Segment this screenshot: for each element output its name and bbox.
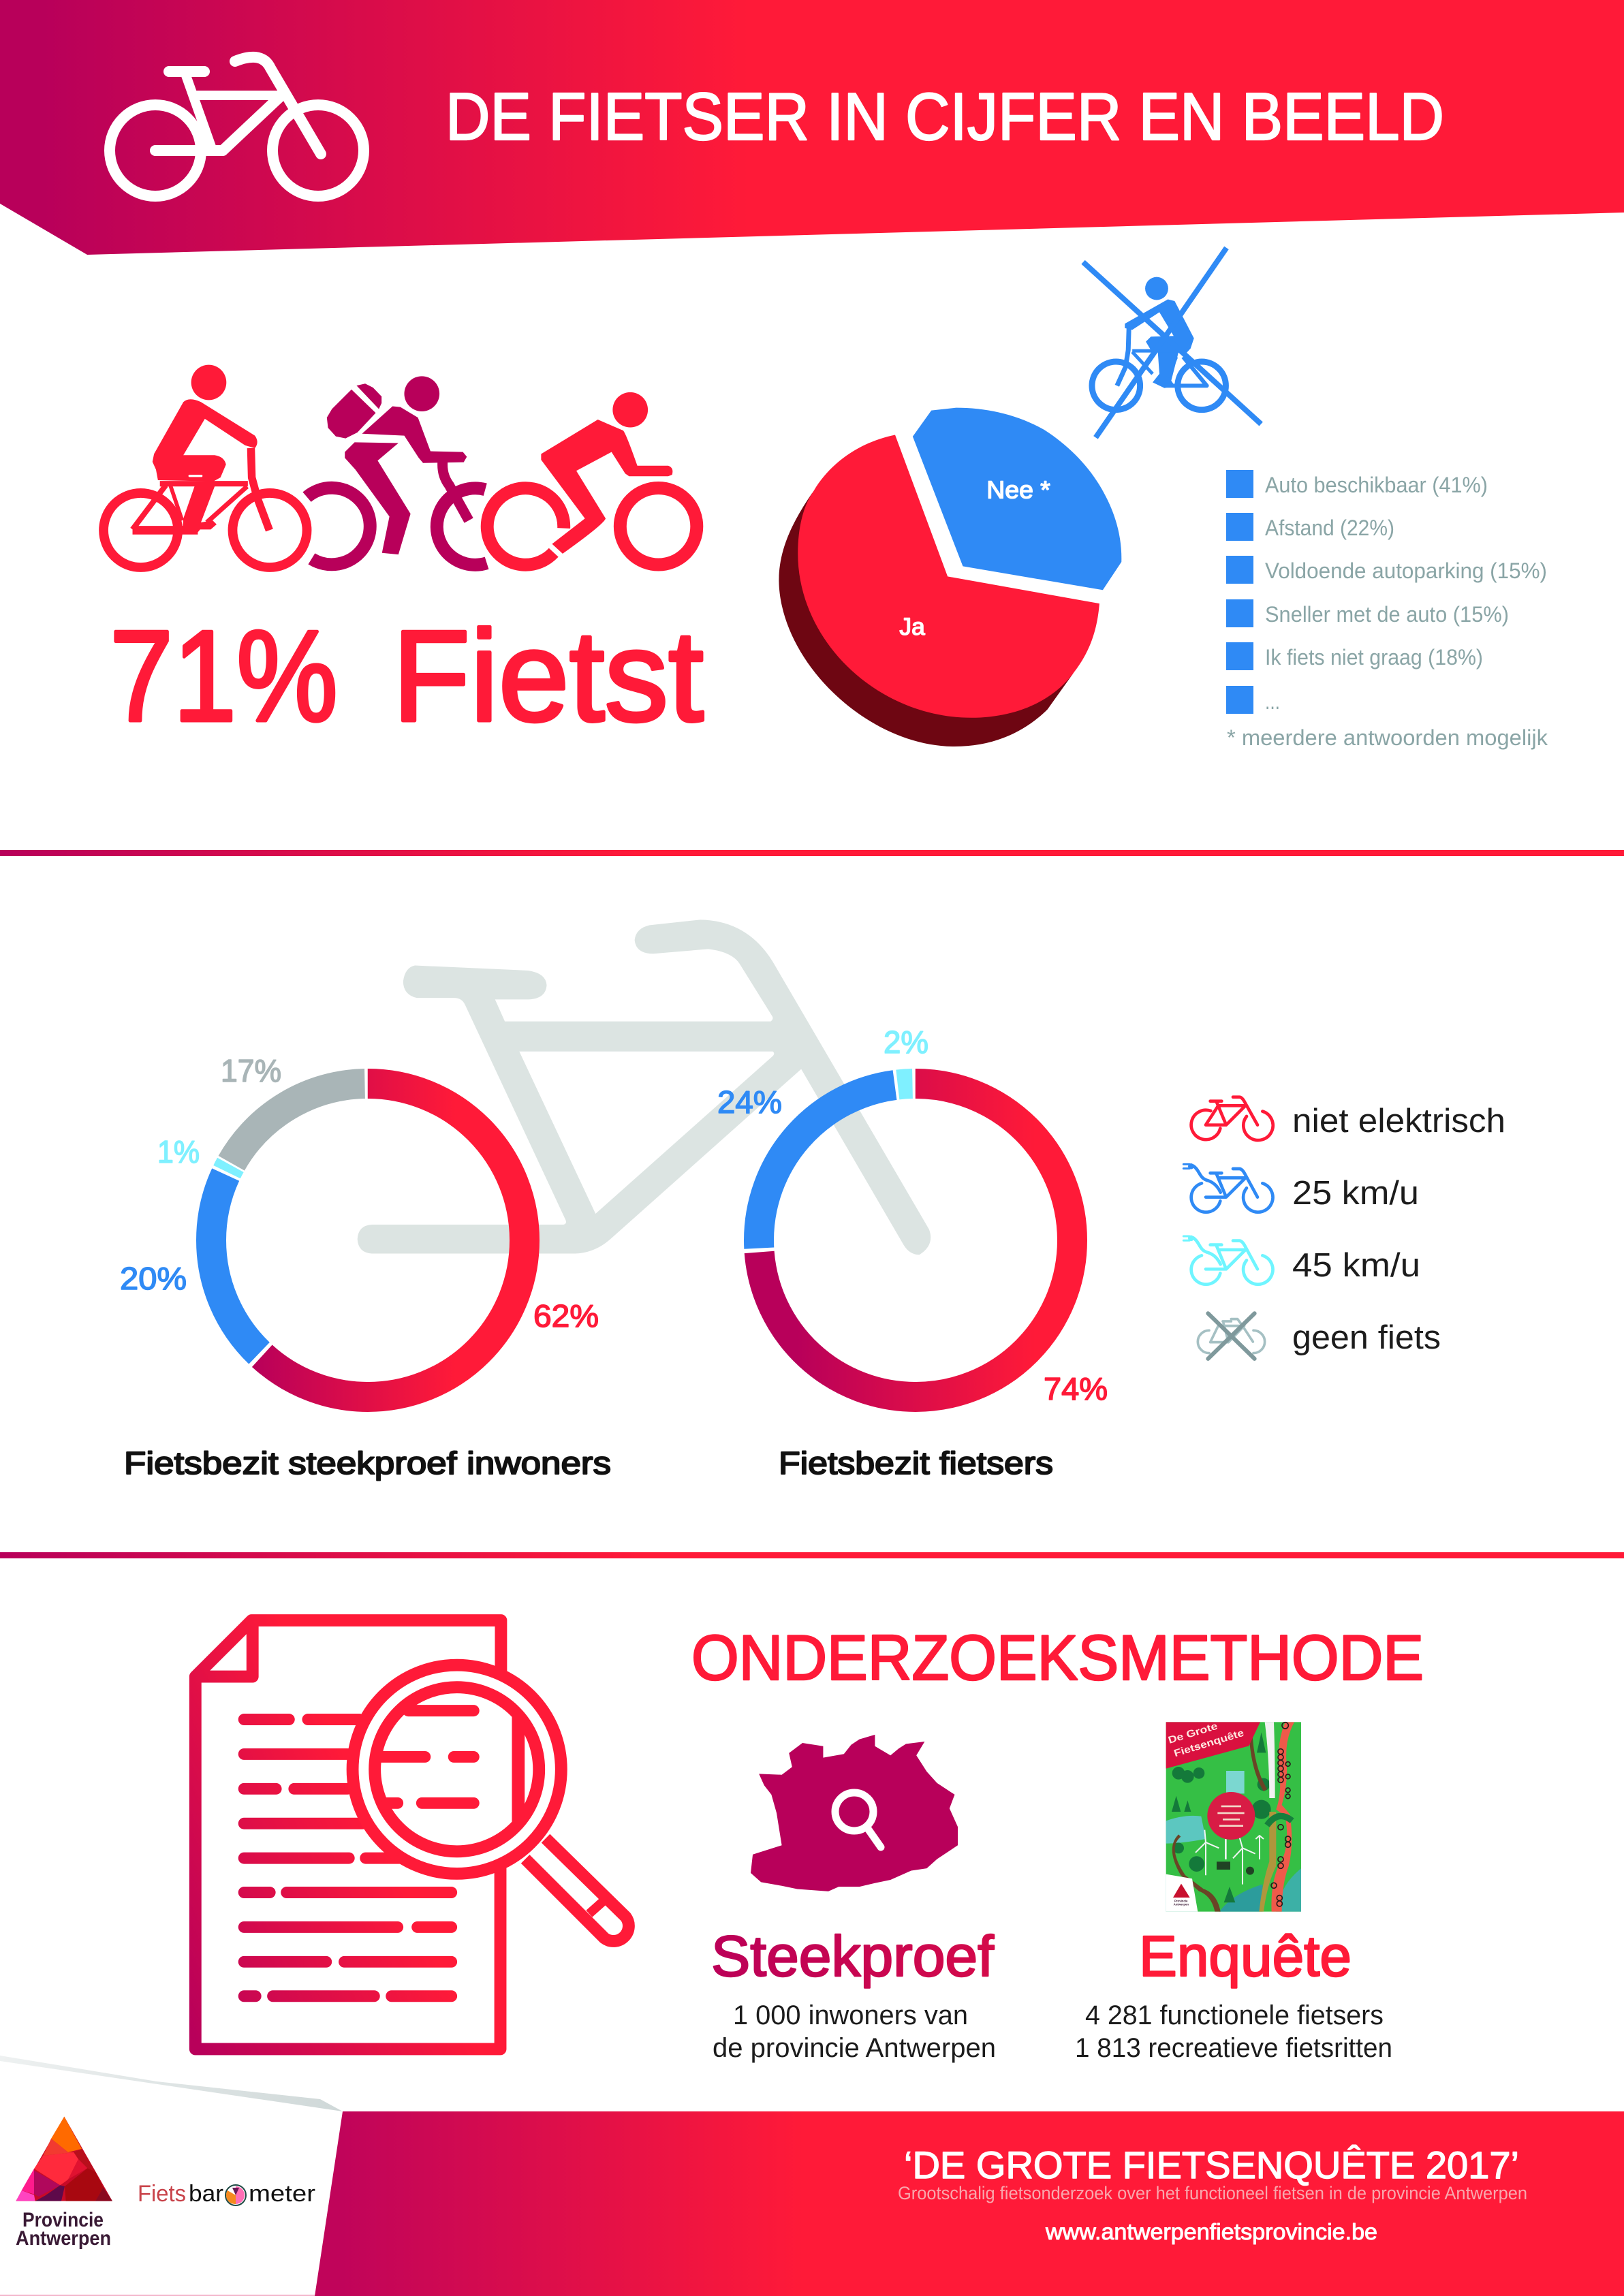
header banner xyxy=(0,0,1624,255)
footer title: ‘DE GROTE FIETSENQUÊTE 2017’ xyxy=(904,2143,1519,2186)
text: enquête details: 1 813 recreatieve fietsritten xyxy=(1075,2033,1392,2063)
legend: reasons for not cycling: ... xyxy=(1265,689,1280,714)
map of province Antwerpen with search icon xyxy=(751,1735,958,1891)
headline: 71% Fietst xyxy=(110,604,704,749)
icon: blue e-bike xyxy=(1183,1163,1272,1212)
value labels xyxy=(120,1053,599,1334)
magnifier xyxy=(353,1665,629,1941)
headline: 71% Fietst: Fietst xyxy=(392,604,704,749)
legend: reasons for not cycling: Auto beschikbaar (41%) xyxy=(1265,473,1488,497)
value labels: 17% xyxy=(221,1053,281,1088)
cyclist 2 with backpack xyxy=(307,376,487,565)
icon: crossed grey bike xyxy=(1198,1313,1265,1359)
logo text xyxy=(16,2209,111,2250)
legend labels: geen fiets xyxy=(1292,1319,1441,1356)
logo: Fietsbarometer: bar xyxy=(189,2181,223,2207)
logo text: Provincie xyxy=(22,2209,104,2231)
legend: reasons for not cycling xyxy=(1226,470,1548,750)
title: DE FIETSER IN CIJFER EN BEELD xyxy=(446,79,1444,154)
booklet cover: De Grote Fietsenquête: De Grote xyxy=(1167,1721,1219,1746)
text: enquête details xyxy=(1075,2000,1392,2063)
icon: red bike xyxy=(1191,1097,1273,1140)
value labels xyxy=(717,1024,1108,1406)
headline: 71% Fietst: 71% xyxy=(110,604,338,749)
legend labels xyxy=(1292,1103,1505,1356)
value labels: 62% xyxy=(533,1298,599,1334)
heading: Enquête: Enquête xyxy=(1139,1924,1352,1988)
icon: cyan speed pedelec xyxy=(1183,1236,1272,1285)
booklet cover: De Grote Fietsenquête: Antwerpen xyxy=(1174,1903,1189,1906)
logo: Fietsbarometer: meter xyxy=(249,2181,315,2207)
donut chart: Fietsbezit steekproef inwoners xyxy=(120,1053,599,1397)
pie chart xyxy=(779,408,1121,746)
icon: three cyclists xyxy=(104,365,697,567)
value labels: 20% xyxy=(120,1261,187,1296)
logo: Fietsbarometer: Fiets xyxy=(138,2181,186,2207)
legend labels: niet elektrisch xyxy=(1292,1103,1505,1139)
booklet cover: De Grote Fietsenquête: Provincie xyxy=(1174,1900,1188,1903)
cyclist 3 xyxy=(487,392,697,565)
icon: crossed out blue cyclist xyxy=(1083,248,1261,437)
legend: reasons for not cycling: Sneller met de auto (15%) xyxy=(1265,602,1509,627)
text: steekproef details: 1 000 inwoners van xyxy=(733,2000,968,2030)
legend: reasons for not cycling: * meerdere antwoorden mogelijk xyxy=(1227,725,1548,750)
icon: white bicycle xyxy=(110,57,364,196)
text: steekproef details xyxy=(713,2000,996,2063)
legend: bike types xyxy=(1183,1097,1505,1359)
caption: Fietsbezit fietsers: Fietsbezit fietsers xyxy=(779,1445,1053,1481)
footer banner xyxy=(0,2056,1624,2296)
value labels: 1% xyxy=(157,1134,200,1169)
caption: Fietsbezit steekproef inwoners: Fietsbezit steekproef inwoners xyxy=(124,1445,611,1481)
legend labels: 25 km/u xyxy=(1292,1175,1419,1212)
text: steekproef details: de provincie Antwerpen xyxy=(713,2033,996,2063)
donut chart: Fietsbezit fietsers xyxy=(717,1024,1108,1406)
text: enquête details: 4 281 functionele fietsers xyxy=(1085,2000,1384,2030)
booklet cover: De Grote Fietsenquête xyxy=(1166,1721,1301,1912)
logo text: Antwerpen xyxy=(16,2227,111,2250)
legend labels: 45 km/u xyxy=(1292,1247,1420,1284)
value labels: 2% xyxy=(884,1024,928,1060)
value labels: 74% xyxy=(1044,1371,1108,1406)
booklet cover: De Grote Fietsenquête: Fietsenquête xyxy=(1172,1728,1245,1759)
label: Nee: Nee * xyxy=(986,476,1050,503)
heading: Steekproef: Steekproef xyxy=(711,1924,995,1988)
logo: Fietsbarometer xyxy=(138,2181,315,2207)
legend: reasons for not cycling: Afstand (22%) xyxy=(1265,516,1394,540)
icon: document with magnifier xyxy=(196,1620,629,2049)
label: Ja: Ja xyxy=(899,614,925,640)
footer subtitle: Grootschalig fietsonderzoek over het functioneel fietsen in de provincie Antwerpen xyxy=(898,2183,1527,2203)
cyclist 1 xyxy=(104,365,307,567)
large grey bicycle background xyxy=(358,919,931,1255)
value labels: 24% xyxy=(717,1084,782,1120)
heading: Onderzoeksmethode: ONDERZOEKSMETHODE xyxy=(691,1622,1424,1693)
logo: Provincie Antwerpen xyxy=(16,2117,112,2250)
legend: reasons for not cycling: Voldoende autoparking (15%) xyxy=(1265,559,1547,583)
footer url: www.antwerpenfietsprovincie.be xyxy=(1045,2219,1377,2244)
legend: reasons for not cycling: Ik fiets niet graag (18%) xyxy=(1265,645,1483,670)
